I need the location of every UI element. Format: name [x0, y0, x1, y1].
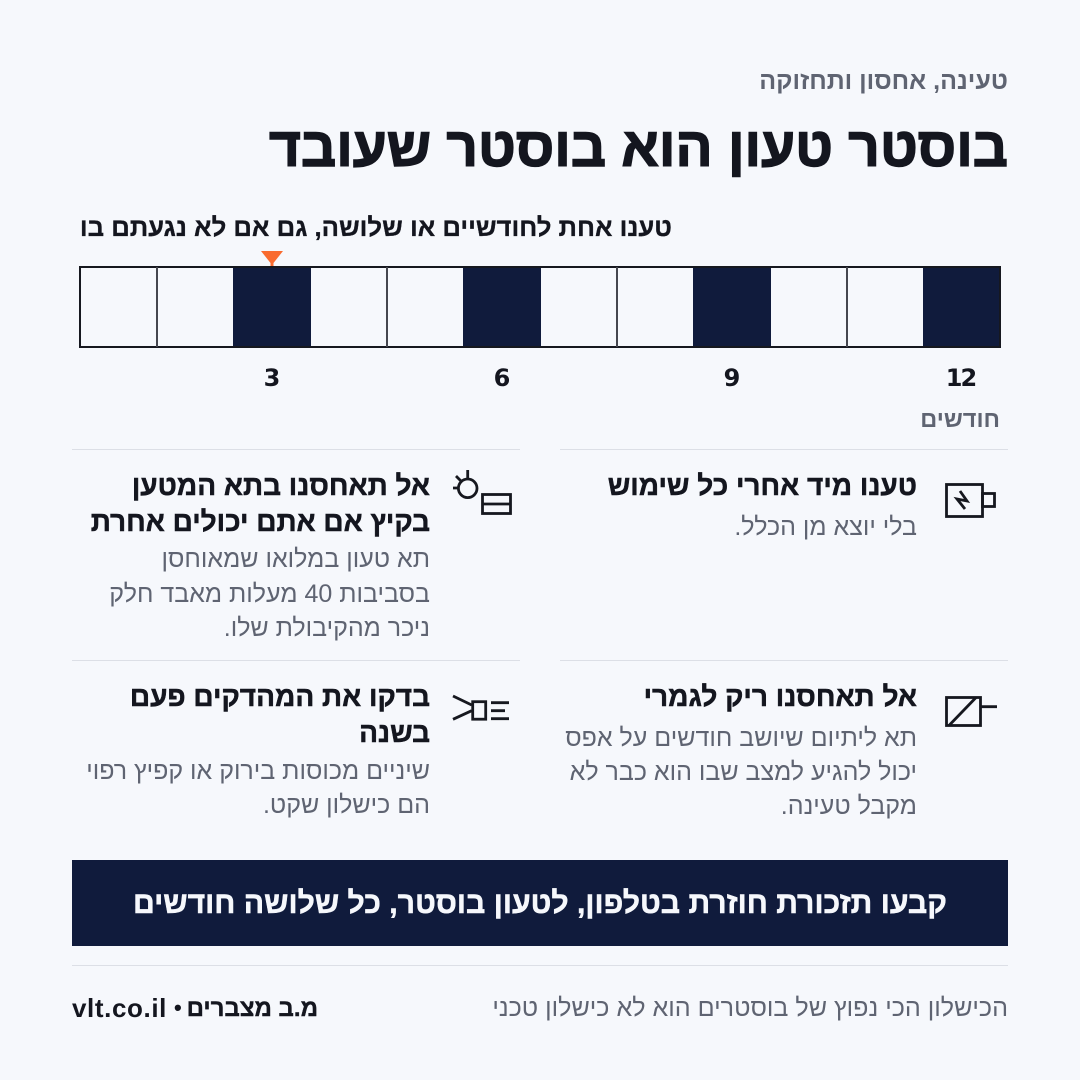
month label 12: 12	[946, 364, 975, 392]
body: תא טעון במלואו שמאוחסן	[162, 545, 430, 573]
brand bullet: •	[174, 995, 182, 1020]
body: בלי יוצא מן הכלל.	[734, 513, 917, 541]
calendar grid: 12 months	[79, 266, 1001, 348]
panel: heat storage: בסביבות 40 מעלות מאבד חלק	[109, 580, 430, 608]
month label 6: 6	[494, 364, 510, 392]
call to action banner	[72, 860, 1008, 946]
panel: check terminals	[86, 681, 509, 819]
icon: battery charging	[945, 483, 996, 518]
kicker: טעינה, אחסון ותחזוקה	[759, 67, 1008, 95]
panel: do not store empty: מקבל טעינה.	[781, 792, 917, 820]
heading: בדקו את המהדקים פעם	[130, 681, 430, 712]
brand name: מ.ב מצברים	[187, 995, 318, 1022]
panel: heat storage	[91, 470, 512, 642]
panel: do not store empty: יכול להגיע למצב שבו הוא כבר לא	[570, 758, 917, 786]
subtitle: טענו אחת לחודשיים או שלושה, גם אם לא נגעתם בו	[80, 214, 672, 242]
panel: check terminals: הם כישלון שקט.	[263, 791, 430, 819]
axis caption: חודשים	[920, 406, 1000, 432]
icon: terminal clamps	[452, 694, 509, 721]
panel: charge after use	[608, 470, 996, 541]
banner text: קבעו תזכורת חוזרת בטלפון, לטעון בוסטר, כל שלושה חודשים	[133, 887, 947, 920]
panel: heat storage: בקיץ אם אתם יכולים אחרת	[91, 506, 430, 537]
month label 3: 3	[264, 364, 280, 392]
footer note: הכישלון הכי נפוץ של בוסטרים הוא לא כישלון טכני	[492, 994, 1008, 1022]
panel: check terminals: בשנה	[359, 717, 430, 748]
icon: empty battery	[945, 696, 997, 727]
brand url: vlt.co.il	[72, 993, 167, 1023]
body: שיניים מכוסות בירוק או קפיץ רפוי	[86, 757, 430, 785]
icon: orange marker	[261, 251, 283, 266]
icon: sun and battery	[453, 470, 512, 515]
heading: אל תאחסנו ריק לגמרי	[644, 681, 917, 712]
panel: do not store empty	[565, 681, 997, 820]
footer brand	[72, 993, 318, 1023]
heading: טענו מיד אחרי כל שימוש	[608, 470, 917, 501]
month label 9: 9	[724, 364, 740, 392]
title: בוסטר טעון הוא בוסטר שעובד	[269, 116, 1008, 178]
heading: אל תאחסנו בתא המטען	[132, 470, 430, 501]
body: תא ליתיום שיושב חודשים על אפס	[565, 724, 917, 752]
panel: heat storage: ניכר מהקיבולת שלו.	[224, 614, 430, 642]
